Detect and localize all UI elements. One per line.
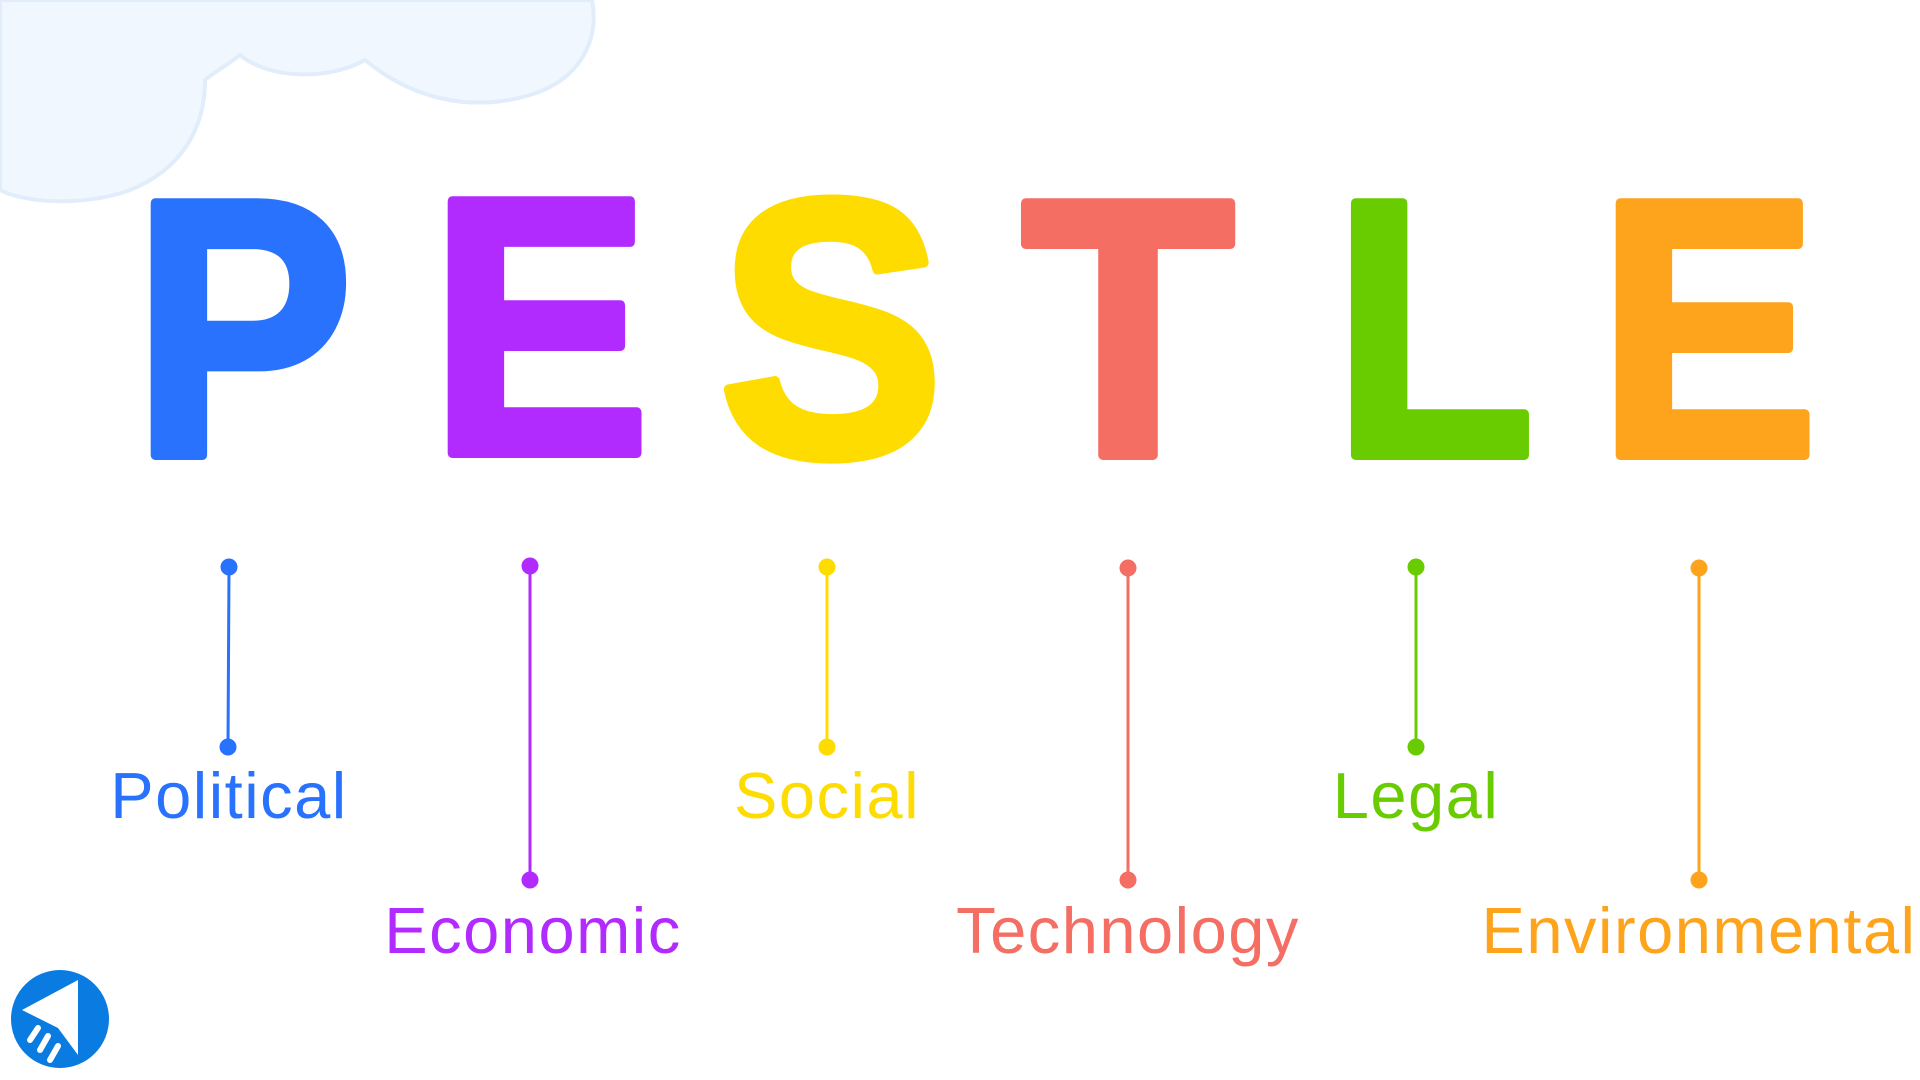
letter S: S [719,124,943,533]
label: Political: Political [110,759,348,832]
connector: Social [820,560,834,754]
letter E (economic): E [430,122,650,531]
connector: Political [221,560,236,754]
connector: Legal [1409,560,1423,754]
letter T: T [1022,124,1234,533]
letter P: P [133,124,353,533]
label: Social: Social [734,759,920,832]
title: PESTLE letters [133,122,1818,533]
label: Legal: Legal [1333,759,1499,832]
icon: logo [11,970,109,1068]
connector: Economic [523,559,537,887]
label: Environmental: Environmental [1482,894,1916,967]
connector: Technology [1121,561,1135,887]
letter E (environmental): E [1598,124,1818,533]
label: Economic: Economic [384,894,682,967]
decorative cloud [0,0,594,201]
label: Technology: Technology [956,894,1300,967]
connector: Environmental [1692,561,1706,887]
labels [110,759,1916,967]
letter L: L [1333,124,1535,533]
